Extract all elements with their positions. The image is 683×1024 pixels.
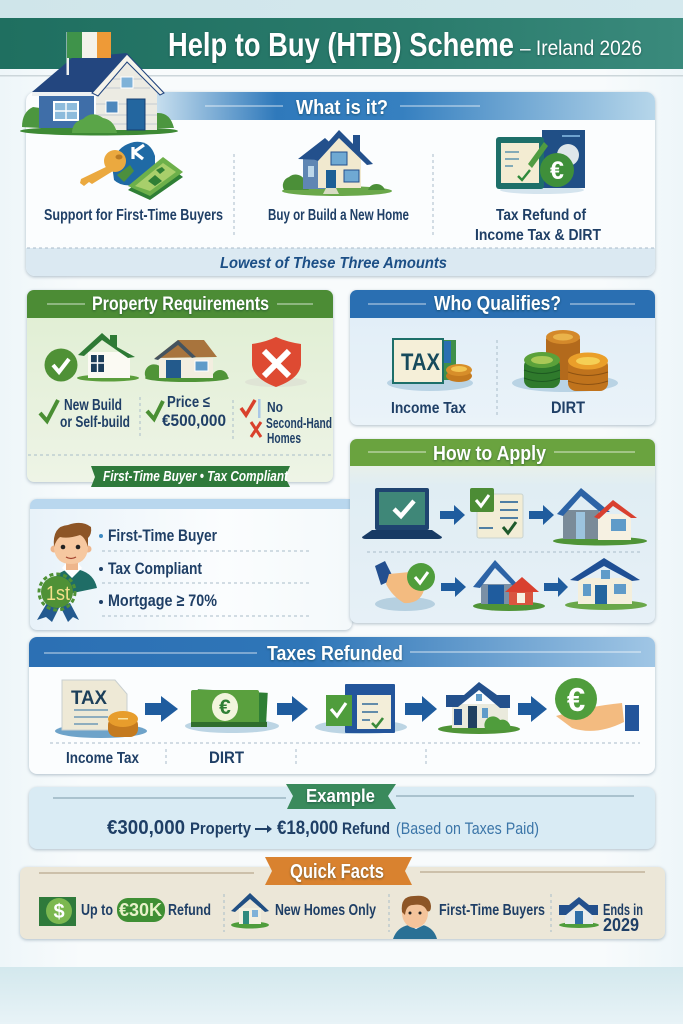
- icon: tax documents: €: [550, 157, 564, 185]
- icon: handshake with check: [375, 561, 435, 611]
- icon: tax paper: TAX: [71, 688, 107, 709]
- icon: checklist: [470, 488, 523, 538]
- example calculation: Property: [190, 819, 251, 838]
- panel: what is it: [26, 92, 655, 276]
- arrow: [145, 696, 178, 722]
- icon: flag: [67, 32, 111, 58]
- icon: hero house with Irish flag: [20, 32, 178, 136]
- icon: key and cash: [80, 142, 183, 200]
- label: tax refund: Tax Refund of: [496, 207, 587, 224]
- arrow: [529, 505, 554, 525]
- fact: refund: Up to: [81, 902, 113, 919]
- ribbon heading: [265, 857, 412, 885]
- ribbon: [91, 466, 290, 487]
- fact: refund: €30K: [119, 900, 162, 920]
- label: tax refund: Income Tax & DIRT: [475, 227, 601, 244]
- heading: What is it?: [296, 97, 388, 119]
- item: tax compliant: Tax Compliant: [108, 559, 202, 578]
- icon: house pair: [473, 560, 545, 611]
- label: support: Support for First-Time Buyers: [44, 207, 223, 224]
- header band: [350, 439, 655, 466]
- fact: refund: $: [53, 901, 65, 923]
- header band: [27, 290, 333, 318]
- panel: example: [29, 784, 655, 849]
- icon: new house: [565, 558, 647, 610]
- label: dirt: DIRT: [209, 748, 245, 767]
- item: price: Price ≤: [167, 394, 210, 411]
- icon: laptop: [362, 488, 442, 539]
- fact: refund: Refund: [168, 902, 211, 919]
- ribbon heading: Quick Facts: [290, 861, 384, 883]
- item: price: €500,000: [162, 411, 226, 430]
- panel: who qualifies: [350, 290, 655, 425]
- icon: tax document and coins: TAX: [401, 349, 440, 376]
- arrow: [440, 505, 465, 525]
- ribbon: First-Time Buyer • Tax Compliant: [103, 469, 289, 485]
- example calculation: (Based on Taxes Paid): [396, 819, 539, 838]
- example calculation: €18,000: [277, 818, 338, 839]
- item: new build: or Self-build: [60, 414, 130, 431]
- arrow: [518, 696, 547, 722]
- panel: quick facts: [20, 857, 665, 939]
- fact: ends in 2029: Ends in: [603, 902, 643, 919]
- label: dirt: DIRT: [551, 398, 586, 417]
- header band: [29, 637, 655, 667]
- icon: tax documents: [496, 130, 585, 194]
- label: income tax: Income Tax: [391, 400, 466, 417]
- fact: first-time buyers: First-Time Buyers: [439, 902, 545, 919]
- label: income tax: Income Tax: [66, 750, 139, 767]
- header band: what is it: [150, 92, 655, 120]
- fact: refund: [39, 897, 211, 926]
- arrow: [405, 696, 437, 722]
- ribbon heading: Example: [306, 785, 375, 806]
- icon: tax paper: [55, 680, 147, 738]
- item: no second-hand: Homes: [267, 430, 301, 447]
- icon: euro banknote: [185, 689, 279, 733]
- heading: Taxes Refunded: [267, 643, 403, 665]
- icon: tax document and coins: [387, 339, 473, 391]
- panel: property requirements: [27, 290, 333, 487]
- arrow: [441, 577, 466, 597]
- arrow: [277, 696, 308, 722]
- icon: shield with cross: [245, 337, 307, 387]
- fact: ends in 2029: 2029: [603, 915, 639, 935]
- fact: new homes: [231, 893, 376, 928]
- fact: ends in 2029: [559, 897, 643, 935]
- example calculation: €300,000: [107, 817, 185, 839]
- footer text: Lowest of These Three Amounts: [220, 255, 447, 272]
- example calculation: [107, 817, 539, 839]
- icon: hand with euro coin: €: [567, 681, 585, 718]
- item: no second-hand: Second-Hand: [266, 415, 332, 432]
- icon: new home: [282, 130, 392, 196]
- icon: euro banknote: €: [219, 696, 231, 719]
- icon: coin stacks: [512, 330, 618, 392]
- heading: How to Apply: [433, 443, 547, 465]
- ribbon heading: [286, 784, 396, 809]
- footer strip: [26, 248, 655, 276]
- arrow: [544, 577, 568, 597]
- label: buy or build: Buy or Build a New Home: [268, 207, 409, 224]
- icon: person with first badge: [37, 523, 97, 622]
- item: no second-hand: No: [267, 399, 283, 416]
- label: tax refund: [475, 207, 601, 244]
- icon: house: [438, 682, 520, 734]
- item: no second-hand: [241, 399, 332, 447]
- icon: brown roof house: [145, 340, 229, 382]
- title banner: [0, 18, 683, 69]
- panel: eligibility list: [30, 499, 352, 630]
- item: price: [147, 394, 226, 430]
- icon: two houses: [553, 488, 647, 546]
- icon: person with first badge: 1st: [46, 583, 70, 605]
- fact: new homes: New Homes Only: [275, 902, 376, 919]
- header band: [350, 290, 655, 318]
- example calculation: Refund: [342, 819, 390, 838]
- subtitle: – Ireland 2026: [520, 37, 642, 60]
- heading: Property Requirements: [92, 294, 269, 315]
- title: Help to Buy (HTB) Scheme: [168, 26, 514, 63]
- item: new build: New Build: [64, 397, 122, 414]
- panel: taxes refunded: [29, 637, 655, 774]
- icon: hand with euro coin: [555, 678, 639, 731]
- fact: first-time buyers: [393, 896, 545, 939]
- icon: check house: [44, 333, 139, 382]
- panel: how to apply: [350, 439, 655, 623]
- item: first-time buyer: First-Time Buyer: [108, 526, 217, 545]
- item: mortgage: Mortgage ≥ 70%: [108, 591, 217, 610]
- heading: Who Qualifies?: [434, 293, 561, 315]
- item: new build: [40, 397, 130, 431]
- icon: checked document: [315, 684, 407, 734]
